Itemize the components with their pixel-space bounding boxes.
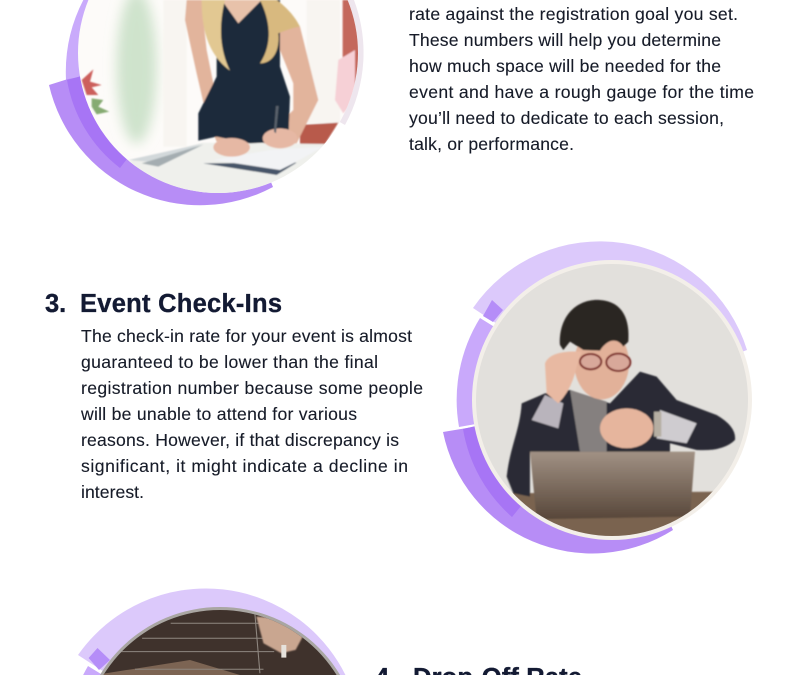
- section 2: body text: event and have a rough gauge for the time: [409, 82, 754, 102]
- section 3: body text: The check-in rate for your event is almost: [81, 326, 412, 346]
- section 3: body text: interest.: [81, 482, 144, 502]
- jacket: [507, 372, 735, 497]
- arc: faint right edge: [218, 0, 364, 125]
- arc: overlap: [67, 75, 130, 168]
- section 4: photo with purple arcs: [68, 588, 360, 675]
- section 2: body text: you’ll need to dedicate to each session,: [409, 108, 724, 128]
- table: [512, 490, 713, 536]
- laptop: [530, 452, 695, 519]
- photo: woman signing at a table: [78, 0, 358, 193]
- arc: top light sweep: [78, 588, 350, 675]
- section 2: body text: [409, 4, 754, 154]
- arc: left: [68, 666, 220, 675]
- hair: [202, 0, 230, 71]
- section 3: heading: Event Check-Ins: [80, 290, 282, 318]
- arc: left: [457, 318, 612, 427]
- wrist hand: [600, 408, 653, 448]
- arc: overlap at bottom: [463, 425, 530, 517]
- section 3: body text: reasons. However, if that discrepancy is: [81, 430, 399, 450]
- section 3: body text: [80, 326, 423, 502]
- section 2: body text: These numbers will help you determine: [409, 30, 721, 50]
- section 3: body text: registration number because some people: [81, 378, 423, 398]
- photo rim: [472, 260, 752, 540]
- section 2: photo with purple arcs: [49, 0, 370, 220]
- arc: overlap: [89, 648, 110, 670]
- section 3: heading: 3.: [45, 290, 66, 318]
- photo: man checking his watch: [476, 264, 748, 536]
- hair: [560, 300, 629, 351]
- arc: lower sweep: [49, 53, 273, 205]
- shirt: [570, 390, 607, 452]
- face: [574, 327, 629, 399]
- arc: lower sweep: [443, 400, 673, 553]
- hands and pen: [213, 138, 250, 157]
- arms: [185, 0, 230, 142]
- dress: [198, 0, 290, 143]
- section 2: body text: how much space will be needed for the: [409, 56, 721, 76]
- arc: top light sweep: [473, 241, 747, 400]
- section 3: photo with purple arcs: [443, 241, 760, 553]
- table: [130, 142, 325, 193]
- arc: upper left: [66, 0, 218, 80]
- plant: [82, 69, 102, 95]
- notebook: [203, 163, 297, 175]
- arc: overlap at top: [483, 300, 503, 322]
- photo rim: [80, 607, 360, 675]
- raised hand: [545, 351, 582, 403]
- section 3: body text: will be unable to attend for various: [80, 404, 357, 424]
- section 2: body text: talk, or performance.: [409, 134, 574, 154]
- glasses: [580, 354, 601, 369]
- section 2: body text: rate against the registration goal you set.: [409, 4, 738, 24]
- section 3: body text: significant, it might indicate a decline in: [81, 456, 408, 476]
- section 3: body text: guaranteed to be lower than the final: [81, 352, 378, 372]
- photo: overhead desk scene: [104, 610, 336, 675]
